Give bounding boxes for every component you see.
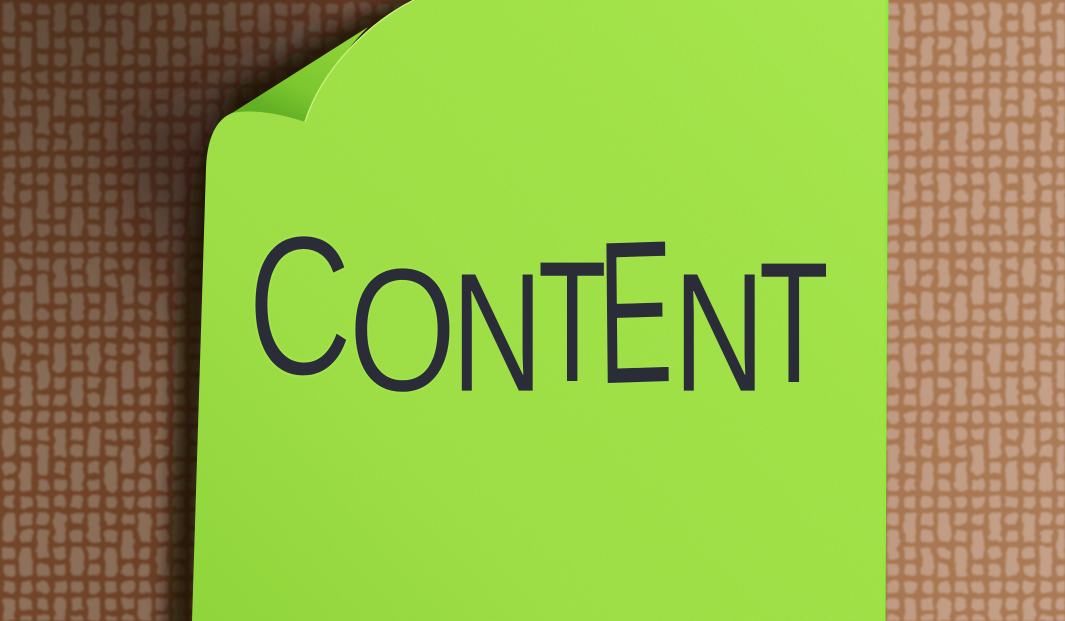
letter C: C (246, 193, 354, 419)
letter T: T (538, 226, 606, 418)
letter N: N (673, 237, 765, 427)
letter N: N (451, 237, 543, 427)
handwritten word: CONTENT (246, 193, 829, 429)
letter T: T (759, 226, 829, 419)
letter E: E (596, 197, 674, 428)
curled corner flap (232, 27, 368, 123)
letter O: O (348, 231, 457, 429)
sticky note paper (192, 0, 888, 621)
